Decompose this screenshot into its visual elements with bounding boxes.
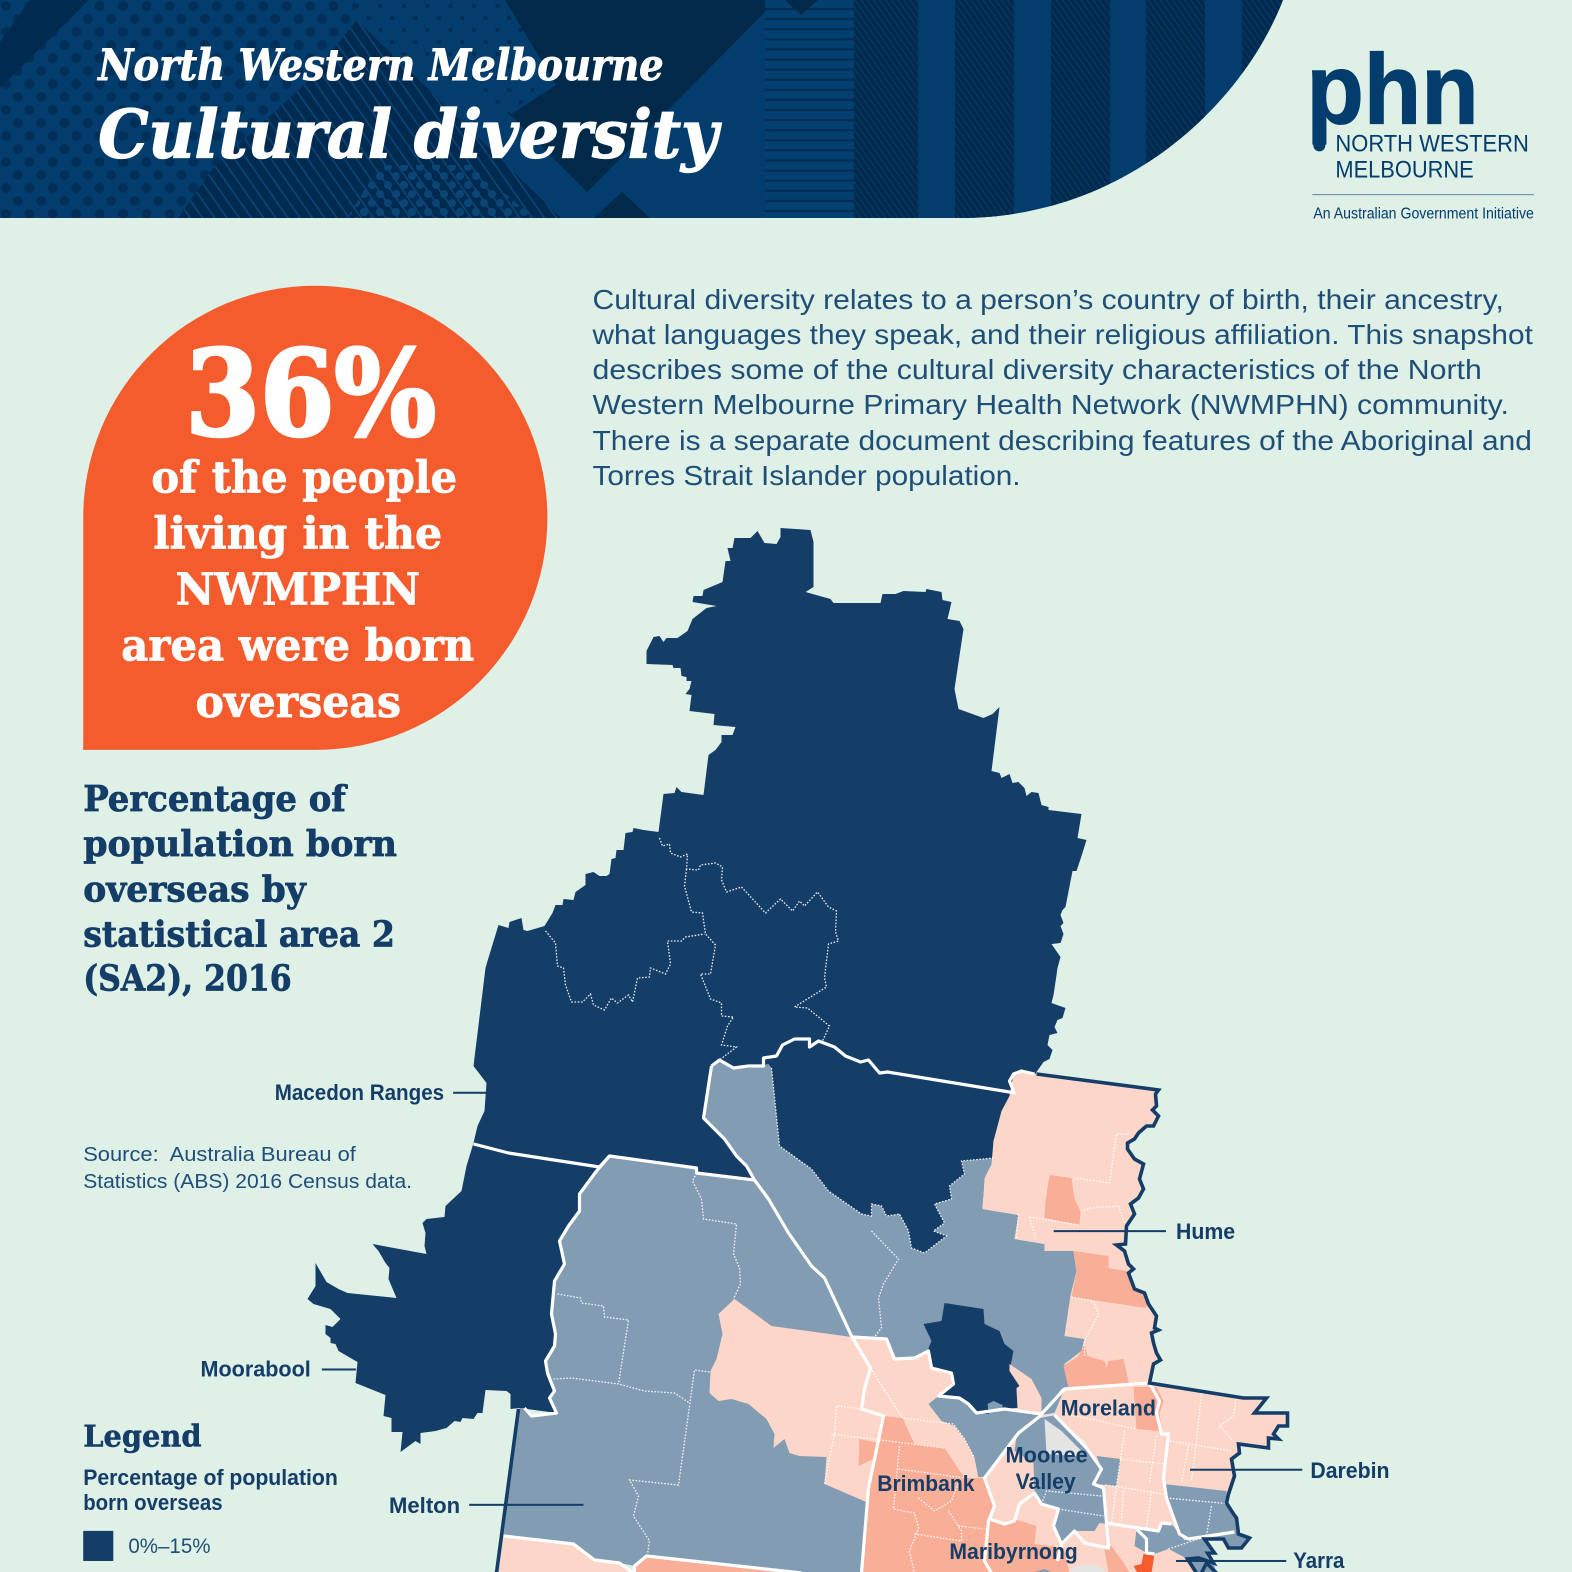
region: Moreland salmon tract <box>1134 1387 1164 1431</box>
legend: born overseas <box>83 1490 223 1515</box>
region: Moonee Valley pale pink <box>984 1415 1110 1572</box>
label: Macedon Ranges: Macedon Ranges <box>275 1080 444 1105</box>
region: Moonee Valley grey <box>1014 1415 1106 1544</box>
logo: PHN North Western Melbourne: An Australian Government Initiative <box>1313 205 1534 223</box>
map heading: population born <box>83 824 397 865</box>
legend <box>83 1420 338 1561</box>
map heading: statistical area 2 <box>83 914 395 955</box>
region: pale pink inner city <box>1152 1549 1198 1572</box>
title: North Western Melbourne <box>96 41 664 91</box>
region: Melton salmon patch <box>858 1439 878 1466</box>
logo: PHN North Western Melbourne: NORTH WESTERN <box>1335 130 1529 157</box>
title <box>96 41 722 173</box>
label: Darebin: Darebin <box>1310 1458 1390 1483</box>
region: pale pink west Melton <box>710 1299 978 1503</box>
callout: 36% born overseas: of the people <box>151 452 457 503</box>
SA2 boundaries: dotted <box>546 838 1236 1572</box>
label: Moonee Valley: Moonee <box>1006 1443 1088 1468</box>
region: inner north-west tracts <box>1104 1546 1130 1572</box>
label: Melton: Melton <box>389 1493 460 1518</box>
source note: Source: Australia Bureau of <box>83 1144 356 1166</box>
region: orange high-share tract <box>1134 1554 1154 1572</box>
region: Hume salmon tracts <box>1044 1175 1146 1388</box>
NWMPHN boundary: dark outline <box>496 1074 1288 1572</box>
intro text: Cultural diversity relates to a person’s country of birth, their ancestry, <box>593 284 1504 315</box>
region: Yarra grey <box>1134 1523 1216 1572</box>
logo: PHN North Western Melbourne: MELBOURNE <box>1335 156 1474 183</box>
region: grey wedge at junction <box>1042 1389 1064 1415</box>
region: Hume pale pink <box>982 1071 1160 1389</box>
intro text: what languages they speak, and their religious affiliation. This snapshot <box>591 319 1533 350</box>
callout: 36% born overseas: NWMPHN <box>175 565 420 616</box>
region: grey tract east of Moonee Valley <box>1096 1456 1120 1486</box>
legend: Percentage of population <box>83 1465 338 1490</box>
region: pink wedge Hume south <box>1004 1364 1042 1413</box>
label: Maribyrnong: Maribyrnong <box>949 1539 1078 1564</box>
source note <box>83 1144 412 1193</box>
callout: 36% born overseas: area were born <box>121 621 474 672</box>
map heading <box>83 779 397 1000</box>
map heading: Percentage of <box>83 779 348 820</box>
source note: Statistics (ABS) 2016 Census data. <box>83 1171 412 1193</box>
label: Hume: Hume <box>1176 1219 1235 1244</box>
legend: 0%–15% <box>128 1535 211 1558</box>
logo: PHN North Western Melbourne <box>1306 34 1534 223</box>
LGA boundaries: white <box>474 1039 1234 1572</box>
intro text <box>591 284 1533 491</box>
label: Moonee Valley <box>1006 1443 1088 1494</box>
region: grey patch below Sunbury pocket <box>988 1401 1002 1412</box>
region: bottom-left Wyndham pale pink <box>498 1536 634 1572</box>
map heading: overseas by <box>83 869 307 910</box>
region: grey-blue Melton and Hume fringe <box>504 1061 1084 1572</box>
region: dark blue Sunbury pocket <box>924 1303 1020 1414</box>
callout: 36% born overseas: overseas <box>195 677 401 728</box>
intro text: describes some of the cultural diversity characteristics of the North <box>593 354 1482 385</box>
callout: 36% born overseas: living in the <box>153 508 442 559</box>
region: Wyndham salmon <box>634 1556 802 1572</box>
map heading: (SA2), 2016 <box>83 959 292 1000</box>
label: Moorabool: Moorabool <box>201 1357 311 1382</box>
region: inner city pale pink block <box>1106 1523 1154 1572</box>
label: Moonee Valley: Valley <box>1016 1469 1076 1494</box>
intro text: Torres Strait Islander population. <box>593 460 1021 491</box>
callout: 36% born overseas: 36% <box>185 324 436 463</box>
callout: 36% born overseas <box>83 286 547 750</box>
label: Moreland: Moreland <box>1061 1396 1156 1421</box>
legend: Legend <box>83 1420 202 1455</box>
header banner <box>0 0 1287 218</box>
intro text: There is a separate document describing features of the Aboriginal and <box>593 425 1532 456</box>
label: Brimbank: Brimbank <box>877 1471 975 1496</box>
region: Brimbank salmon <box>862 1416 994 1572</box>
title: Cultural diversity <box>98 95 722 173</box>
region: no data light grey <box>1044 1419 1082 1456</box>
map: SA2 choropleth <box>308 528 1288 1572</box>
region: Maribyrnong salmon <box>982 1519 1070 1572</box>
logo: PHN North Western Melbourne: phn <box>1306 34 1479 145</box>
region: Banyule grey <box>1164 1484 1250 1548</box>
intro text: Western Melbourne Primary Health Network (NWMPHN) community. <box>593 389 1509 420</box>
region: Moreland and Darebin pale pink <box>1054 1383 1288 1534</box>
region: dark blue outer local government areas <box>308 528 1086 1452</box>
